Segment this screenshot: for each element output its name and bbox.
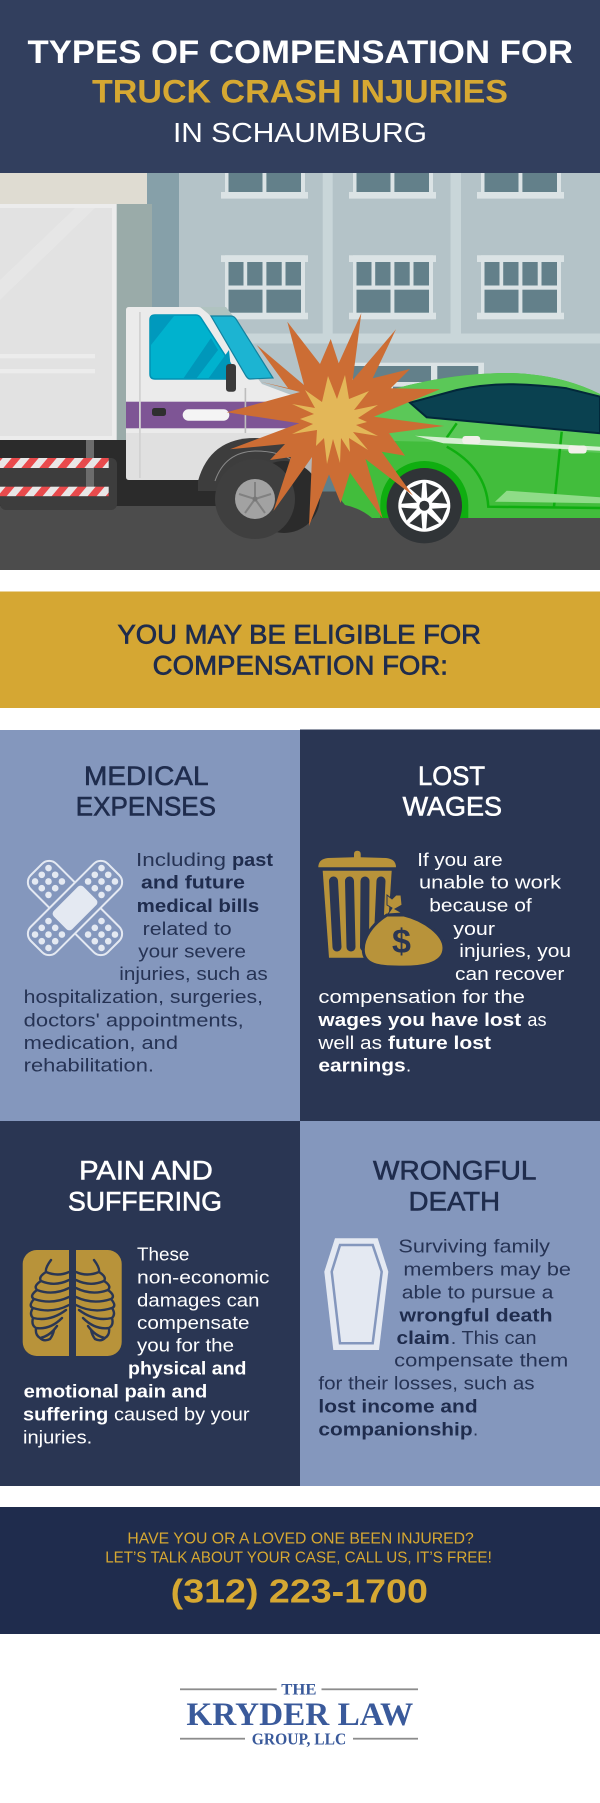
eligibility banner: COMPENSATION FOR: (153, 651, 448, 681)
heading: pain and suffering (68, 1155, 222, 1216)
icon: crossed bandages (24, 857, 126, 959)
panel: wrongful death (300, 1121, 600, 1486)
text: lost wages: well as (317, 1032, 382, 1053)
text: pain and suffering (23, 1244, 269, 1447)
heading: wrongful death: WRONGFUL (373, 1155, 536, 1185)
text: lost wages: earnings (318, 1054, 406, 1076)
text: pain and suffering: damages can (137, 1290, 260, 1311)
text: wrongful death: compensate them (394, 1350, 568, 1371)
call to action: LET’S TALK ABOUT YOUR CASE, CALL US, IT’S FREE! (105, 1549, 492, 1566)
text: medical expenses: medication, and (24, 1032, 178, 1053)
logo: The Kryder Law Group, LLC: KRYDER LAW (186, 1697, 413, 1733)
text: lost wages: If you are (417, 849, 503, 870)
text: lost wages: can recover (455, 963, 564, 984)
text: lost wages: compensation for the (318, 986, 525, 1007)
text: pain and suffering: non-economic (137, 1267, 269, 1288)
cab windows (150, 315, 273, 379)
panel: lost wages (300, 730, 600, 1121)
heading: medical expenses: EXPENSES (76, 792, 216, 822)
text: lost wages: injuries, you (459, 940, 571, 961)
crash explosion (227, 313, 444, 526)
green car (337, 373, 600, 543)
icon: rib cage (23, 1250, 122, 1356)
text: lost wages: your (453, 918, 495, 939)
text: pain and suffering: caused by your (114, 1404, 250, 1425)
heading: wrongful death (373, 1155, 536, 1216)
text: lost wages: unable to work (419, 872, 562, 893)
heading: medical expenses: MEDICAL (84, 761, 209, 791)
text: lost wages: because of (429, 895, 533, 916)
building facade (205, 173, 600, 413)
logo: The Kryder Law Group, LLC: GROUP, LLC (252, 1730, 346, 1749)
text: medical expenses: and future (141, 872, 245, 893)
icon: trash can and money bag (318, 851, 444, 967)
call to action: HAVE YOU OR A LOVED ONE BEEN INJURED? (127, 1530, 474, 1547)
text: wrongful death: claim (396, 1327, 450, 1348)
text: medical expenses: past (232, 849, 273, 870)
call to action (0, 1507, 600, 1634)
text: lost wages: . (406, 1054, 411, 1076)
panel: medical expenses (0, 730, 300, 1121)
text: wrongful death (318, 1236, 571, 1439)
logo: The Kryder Law Group, LLC (180, 1682, 418, 1749)
heading: lost wages: WAGES (403, 792, 502, 822)
heading: medical expenses (76, 761, 216, 822)
text: wrongful death: companionship (318, 1418, 473, 1439)
text: pain and suffering: compensate (137, 1312, 250, 1333)
text: medical expenses (24, 849, 273, 1076)
title header: TRUCK CRASH INJURIES (92, 74, 508, 110)
title header: TYPES OF COMPENSATION FOR (28, 34, 573, 70)
heading: lost wages: LOST (418, 761, 485, 791)
eligibility banner (0, 592, 600, 708)
text: pain and suffering: suffering (23, 1404, 108, 1425)
heading: pain and suffering: SUFFERING (68, 1186, 222, 1216)
text: wrongful death: able to pursue a (402, 1282, 554, 1303)
text: wrongful death: lost income and (318, 1395, 478, 1416)
text: medical expenses: hospitalization, surgeries, (24, 986, 263, 1007)
text: medical expenses: Including (136, 849, 226, 870)
text: lost wages: wages you have lost (317, 1009, 521, 1030)
text: medical expenses: doctors' appointments, (24, 1010, 244, 1030)
text: wrongful death: . This can (451, 1327, 536, 1348)
text: wrongful death: Surviving family (398, 1236, 551, 1257)
text: wrongful death: for their losses, such as (318, 1372, 535, 1393)
truck (0, 173, 320, 539)
text: pain and suffering: These (137, 1244, 189, 1265)
title header (0, 0, 600, 173)
text: wrongful death: . (473, 1418, 478, 1439)
text: wrongful death: members may be (403, 1259, 571, 1280)
text: medical expenses: your severe (138, 940, 246, 961)
text: pain and suffering: you for the (137, 1335, 234, 1356)
title header: IN SCHAUMBURG (173, 117, 427, 148)
text: medical expenses: rehabilitation. (24, 1054, 154, 1076)
truck wheels (215, 459, 320, 539)
illustration: truck crashing into green car (0, 173, 600, 570)
text: pain and suffering: emotional pain and (24, 1380, 207, 1401)
icon: coffin (324, 1238, 388, 1350)
text: medical expenses: related to (143, 918, 232, 939)
logo: The Kryder Law Group, LLC: THE (281, 1682, 316, 1699)
text: pain and suffering: injuries. (23, 1426, 92, 1447)
heading: wrongful death: DEATH (409, 1186, 500, 1216)
text: medical expenses: medical bills (137, 895, 259, 916)
text: wrongful death: wrongful death (398, 1304, 553, 1325)
text: pain and suffering: physical and (128, 1358, 246, 1378)
text: lost wages: future lost (388, 1032, 491, 1053)
road (0, 491, 600, 570)
text: lost wages: as (527, 1009, 546, 1030)
panel: pain and suffering (0, 1121, 300, 1486)
call to action: (312) 223-1700 (171, 1573, 428, 1610)
heading: lost wages (403, 761, 502, 822)
text: medical expenses: injuries, such as (119, 963, 268, 984)
icon: trash can and money bag: $ (392, 923, 411, 961)
text: lost wages (317, 849, 571, 1076)
heading: pain and suffering: PAIN AND (79, 1155, 213, 1185)
eligibility banner: YOU MAY BE ELIGIBLE FOR (118, 620, 481, 650)
